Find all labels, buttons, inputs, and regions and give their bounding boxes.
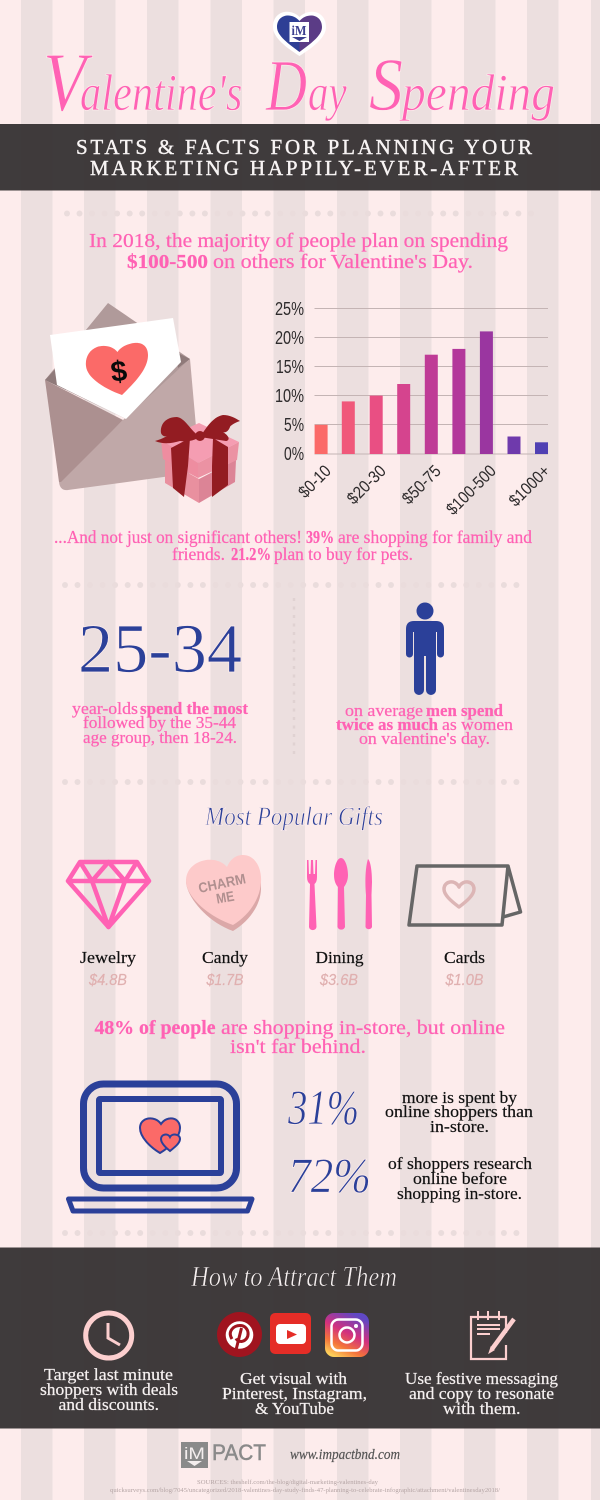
stat: age group 25-34: spend the most (140, 699, 248, 718)
stat: age group 25-34: age group, then 18-24. (83, 728, 237, 747)
gift: dining (307, 858, 372, 989)
icon: candy heart (186, 855, 261, 931)
text: not just significant others: plan to buy for pets. (274, 544, 413, 564)
stat: age group 25-34: followed by the 35-44 (83, 713, 237, 732)
text: in-store shopping: are shopping in-store, but online (221, 1017, 505, 1039)
gift: dining: $3.6B (319, 972, 358, 989)
gift: candy: Candy (202, 948, 249, 967)
headline: majority spending (89, 230, 508, 273)
column: last minute shoppers: shoppers with deals (40, 1380, 178, 1399)
gift: dining: Dining (316, 948, 364, 967)
text: in-store shopping: 48% of people (94, 1017, 216, 1039)
title: alentine's (80, 65, 253, 122)
headline: majority spending: on others for Valentine's Day. (213, 251, 473, 273)
heading: most popular gifts: Most Popular Gifts (204, 802, 383, 831)
stat: 31 percent: more is spent by (402, 1088, 518, 1107)
panel: how to attract them (0, 1248, 600, 1428)
title: ay (308, 65, 357, 122)
column: social platforms: Pinterest, Instagram, (222, 1384, 367, 1403)
icon: heart with dollar sign: $ (109, 355, 129, 389)
bar chart: spending: 15% (276, 357, 304, 377)
stat: age group 25-34: year-olds (72, 699, 138, 718)
bar chart: spending: 5% (284, 415, 304, 435)
title: D (265, 45, 307, 126)
gift: jewelry: Jewelry (80, 948, 137, 967)
banner: subtitle (0, 124, 600, 190)
footer logo: impact (181, 1440, 266, 1468)
logo: heart badge (273, 12, 326, 56)
icon: instagram (325, 1313, 369, 1357)
stat: 31 percent: in-store. (430, 1117, 489, 1136)
bar chart: spending: 20% (275, 328, 304, 348)
stat: 31 percent: 31% (287, 1079, 359, 1135)
title: S (369, 44, 403, 127)
stat: 31 percent: online shoppers than (385, 1102, 534, 1121)
stat: men spend twice as much: as women (442, 715, 514, 734)
gift: jewelry (68, 862, 149, 989)
icon: youtube (270, 1313, 311, 1354)
stat: 72 percent: of shoppers research (388, 1154, 533, 1173)
icon: candy heart: ME (215, 888, 235, 907)
illustration: laptop with hearts (68, 1084, 252, 1211)
column: last minute shoppers: and discounts. (58, 1395, 159, 1414)
footer logo: impact: iM (184, 1444, 205, 1463)
stat: men spend twice as much: on valentine's day. (359, 729, 490, 748)
stat: men spend twice as much (336, 602, 514, 748)
icon: notepad and pencil (471, 1311, 514, 1359)
text: not just significant others: 21.2% (231, 544, 271, 564)
bar chart: spending: $50-75 (398, 461, 445, 508)
title: pending (398, 65, 555, 122)
bar chart: spending (275, 299, 554, 519)
stat: men spend twice as much: men spend (426, 701, 504, 720)
headline: majority spending: $100-500 (127, 251, 208, 273)
column: festive messaging (405, 1311, 558, 1418)
column: festive messaging: Use festive messaging (405, 1369, 558, 1388)
stat: 72 percent: 72% (288, 1147, 371, 1203)
stat: 31 percent (287, 1079, 534, 1136)
gift: jewelry: $4.8B (88, 972, 127, 989)
text: not just significant others: ...And not just on significant others! (54, 527, 302, 547)
stat: age group 25-34: 25-34 (78, 611, 242, 688)
bar chart: spending: 10% (275, 386, 304, 406)
text: not just significant others: friends. (172, 544, 225, 564)
bar chart: spending: $20-30 (343, 461, 390, 508)
icon: greeting card (409, 866, 520, 925)
gift: candy: $1.7B (206, 972, 244, 989)
gift: candy (186, 855, 261, 989)
stat: 72 percent: online before (413, 1169, 507, 1188)
text: not just significant others: are shopping for family and (338, 527, 532, 547)
column: festive messaging: and copy to resonate (409, 1384, 554, 1403)
stat: 72 percent (288, 1147, 533, 1203)
column: social platforms: Get visual with (240, 1369, 347, 1388)
logo: heart badge: iM (292, 24, 306, 39)
icon: man (406, 602, 444, 695)
gift: cards: $1.0B (445, 972, 484, 989)
footer: sources: SOURCES: theshelf.com/the-blog/digital-marketing-valentines-day (197, 1479, 379, 1486)
footer logo: impact: PACT (212, 1440, 266, 1465)
banner: subtitle: STATS & FACTS FOR PLANNING YOUR (76, 135, 532, 159)
title: V (43, 36, 93, 129)
heading: how to attract them: How to Attract Them (190, 1261, 397, 1293)
footer: sources (110, 1479, 500, 1494)
footer: sources: quicksurveys.com/blog/7045/uncategorized/2018-valentines-day-study-finds-47-planning-to-celebrate-infographic/attachment/valentinesday2018/ (110, 1487, 500, 1494)
text: not just significant others: 39% (306, 527, 334, 547)
icon: cutlery (307, 858, 372, 930)
stat: men spend twice as much: twice as much (336, 715, 439, 734)
bar chart: spending: $1000+ (505, 461, 554, 510)
column: last minute shoppers (40, 1313, 178, 1414)
footer: website: www.impactbnd.com (290, 1447, 400, 1463)
bar chart: spending: $100-500 (443, 461, 500, 519)
bar chart: spending: $0-10 (295, 461, 335, 502)
icon: heart with dollar sign (86, 343, 148, 395)
stat: 72 percent: shopping in-store. (397, 1184, 522, 1203)
column: social platforms: & YouTube (255, 1399, 334, 1418)
column: last minute shoppers: Target last minute (44, 1365, 173, 1384)
icon: pinterest (217, 1312, 262, 1357)
bar chart: spending: 0% (284, 444, 304, 464)
gift: cards (409, 866, 520, 989)
icon: diamond (68, 862, 149, 927)
text: not just significant others (54, 527, 532, 564)
column: social platforms (217, 1312, 369, 1418)
gift: cards: Cards (444, 948, 485, 967)
text: in-store shopping: isn't far behind. (230, 1036, 366, 1058)
stat: age group 25-34 (72, 611, 248, 747)
banner: subtitle: MARKETING HAPPILY-EVER-AFTER (90, 156, 518, 180)
bar chart: spending: 25% (275, 299, 304, 319)
headline: majority spending: In 2018, the majority of people plan on spending (89, 230, 508, 252)
stat: men spend twice as much: on average (345, 701, 423, 720)
illustration: envelope with card (45, 303, 200, 490)
icon: clock (86, 1313, 132, 1358)
column: festive messaging: with them. (443, 1399, 520, 1418)
illustration: gift box (155, 415, 240, 503)
icon: candy heart: CHARM (197, 870, 247, 896)
text: in-store shopping (94, 1017, 505, 1058)
